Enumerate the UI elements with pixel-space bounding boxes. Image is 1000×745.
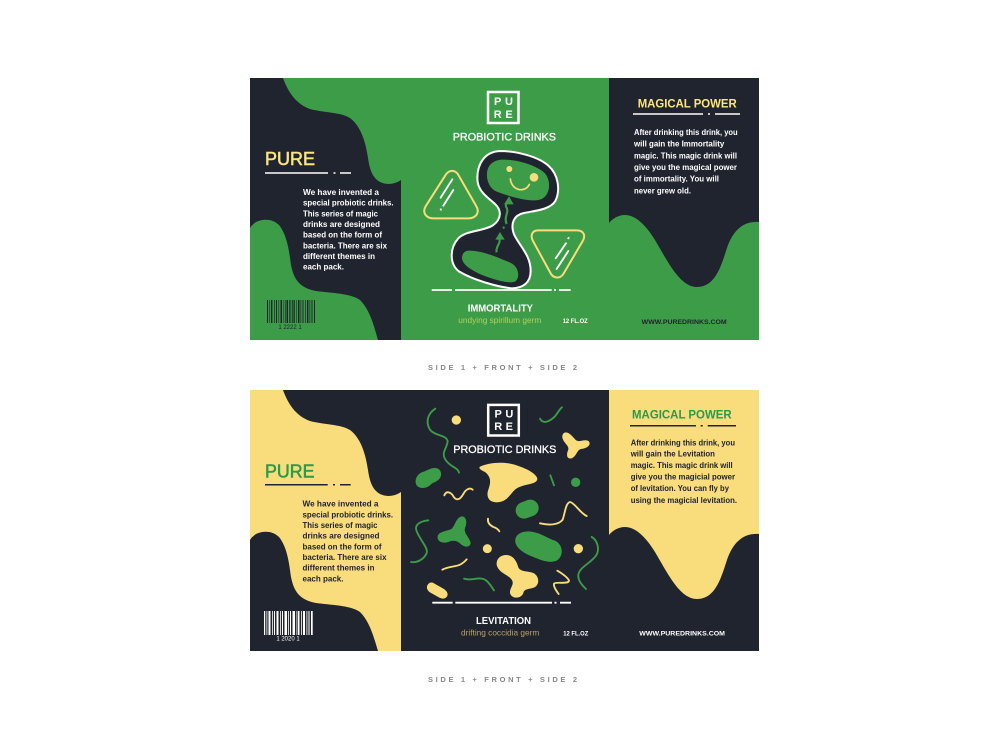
logo: PURE square: P xyxy=(494,96,501,108)
text block: magic description: of immortality. You will xyxy=(634,174,719,184)
text block: magic description: magic. This magic drink will xyxy=(631,460,733,470)
heading: magical power: MAGICAL POWER xyxy=(638,96,737,110)
text block: magic description xyxy=(630,437,737,505)
heading: probiotic drinks: PROBIOTIC DRINKS xyxy=(453,132,556,144)
icon: right triangle xyxy=(532,230,584,278)
divider: side heading rule xyxy=(265,172,351,174)
text block: side description: We have invented a xyxy=(303,187,379,197)
label: volume: 12 FL.OZ xyxy=(563,632,589,638)
text block: side description: bacteria. There are six xyxy=(303,240,387,250)
logo: PURE square: U xyxy=(505,96,513,108)
icon: germ upper cell xyxy=(487,160,549,200)
text block: magic description: will gain the Immortality xyxy=(633,139,725,149)
divider: side heading rule xyxy=(265,484,351,486)
logo: PURE square: R xyxy=(494,421,502,433)
text block: side description: This series of magic xyxy=(303,208,378,218)
logo: PURE square: R xyxy=(494,109,502,121)
yellow squiggles xyxy=(442,489,587,594)
text block: side description: each pack. xyxy=(302,573,344,583)
divider: right heading rule xyxy=(633,113,740,115)
text block: side description: based on the form of xyxy=(302,541,382,551)
text block: magic description: give you the magicial power xyxy=(631,472,736,482)
text block: side description: based on the form of xyxy=(303,230,382,240)
divider: front rule xyxy=(432,289,571,291)
green germs xyxy=(416,468,580,562)
text block: magic description: using the magicial levitation. xyxy=(631,495,737,505)
panel: right side yellow shape xyxy=(609,390,759,599)
text block: magic description xyxy=(633,127,738,195)
illustration: immortality germ xyxy=(424,151,584,288)
caption: top label: SIDE 1 + FRONT + SIDE 2 xyxy=(428,363,577,372)
label: website: WWW.PUREDRINKS.COM xyxy=(639,631,725,638)
panel: left side dark shape xyxy=(250,78,401,340)
text block: magic description: After drinking this drink, you xyxy=(631,437,735,447)
logo: PURE square xyxy=(488,92,518,123)
text block: side description xyxy=(303,187,394,272)
text block: side description: each pack. xyxy=(303,262,344,272)
text block: side description: different themes in xyxy=(303,251,375,261)
divider: right heading rule xyxy=(630,425,736,427)
text block: magic description: never grew old. xyxy=(634,185,691,195)
icon: left triangle xyxy=(424,171,478,218)
panel: right side dark shape xyxy=(609,78,759,287)
panel background: dark xyxy=(250,390,759,651)
barcode xyxy=(264,611,313,642)
yellow germs xyxy=(427,415,590,599)
panel background: green xyxy=(250,78,759,340)
text block: magic description: magic. This magic drink will xyxy=(634,150,737,160)
label: website: WWW.PUREDRINKS.COM xyxy=(642,319,727,326)
divider: front rule xyxy=(432,602,571,604)
text block: magic description: give you the magical power xyxy=(634,162,738,172)
label: flavour name: LEVITATION xyxy=(476,615,531,627)
logo: PURE square xyxy=(488,405,519,436)
text block: side description: drinks are designed xyxy=(302,531,380,541)
heading: magical power: MAGICAL POWER xyxy=(632,408,732,422)
icon: germ body xyxy=(452,151,558,288)
package label: levitation xyxy=(250,390,759,651)
text block: side description xyxy=(302,499,393,583)
text block: side description: special probiotic drinks. xyxy=(302,509,393,519)
heading: PURE: PURE xyxy=(265,148,315,169)
label: germ name: undying spirillum germ xyxy=(458,315,541,325)
package label: immortality xyxy=(250,78,759,340)
barcode: 1 2222 1 xyxy=(278,325,302,331)
caption: bottom label: SIDE 1 + FRONT + SIDE 2 xyxy=(428,675,577,684)
arrows: growing upward xyxy=(495,196,514,252)
text block: side description: We have invented a xyxy=(302,499,379,509)
label: flavour name: IMMORTALITY xyxy=(468,303,533,315)
illustration: levitation germs xyxy=(411,407,598,599)
logo: PURE square: E xyxy=(505,109,513,121)
barcode xyxy=(267,300,315,331)
text block: magic description: After drinking this drink, you xyxy=(634,127,738,137)
text block: magic description: will gain the Levitation xyxy=(630,449,715,459)
label: germ name: drifting coccidia germ xyxy=(461,628,539,638)
logo: PURE square: U xyxy=(505,408,513,420)
barcode: 1 2020 1 xyxy=(276,636,300,642)
panel: left side yellow shape xyxy=(250,390,401,651)
text block: side description: drinks are designed xyxy=(303,219,380,229)
text block: side description: This series of magic xyxy=(302,520,378,530)
heading: PURE: PURE xyxy=(265,460,314,481)
icon: germ lower cell xyxy=(462,251,518,282)
text block: side description: different themes in xyxy=(302,563,374,573)
text block: side description: special probiotic drinks. xyxy=(303,198,394,208)
green squiggles xyxy=(411,407,598,590)
heading: probiotic drinks: PROBIOTIC DRINKS xyxy=(453,444,557,456)
text block: magic description: of levitation. You can fly by xyxy=(631,483,729,493)
text block: side description: bacteria. There are six xyxy=(302,552,387,562)
logo: PURE square: P xyxy=(495,408,502,420)
icon: germ face xyxy=(506,166,538,190)
label: volume: 12 FL.OZ xyxy=(563,319,588,325)
logo: PURE square: E xyxy=(506,421,513,433)
